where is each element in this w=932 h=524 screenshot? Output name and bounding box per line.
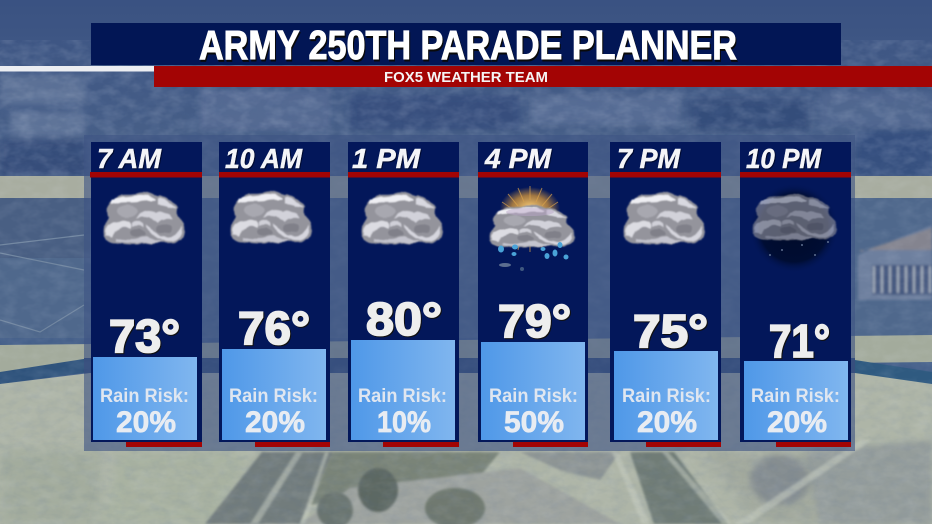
time label: 7 PM [617,143,681,174]
panel: 4 PM [478,142,588,447]
time label: 4 PM [484,143,552,174]
panel: 7 PM [610,142,721,447]
rain risk value: 20% [637,406,697,439]
title banner [0,22,932,87]
panel: 10 AM [219,142,330,447]
time label: 10 AM [225,143,303,174]
trees [317,455,810,524]
time label: 10 PM [746,143,822,174]
backing panel [84,135,855,451]
temperature: 71° [769,315,830,367]
title: ARMY 250TH PARADE PLANNER [199,22,737,68]
rain risk value: 50% [504,406,564,439]
rain risk label: Rain Risk: [751,386,840,407]
panel: 1 PM [348,142,459,447]
white accent line [0,66,155,72]
panel: 7 AM [90,142,202,447]
rain risk value: 20% [245,406,305,439]
icon: cloudy [624,192,705,244]
navy title bar [91,23,841,65]
city blocks [0,75,932,176]
temperature: 73° [109,310,180,362]
rain risk value: 10% [377,406,431,439]
blue-grey lawn [0,198,932,338]
lower lawn strip [0,335,932,372]
time label: 1 PM [352,143,421,174]
texture noise [0,40,932,176]
temperature: 75° [633,305,708,357]
rain risk box [351,340,455,440]
monument shadow wedges [205,452,728,524]
icon: night cloud [749,183,839,273]
classical building [858,225,932,300]
rain risk label: Rain Risk: [622,386,711,407]
time label: 7 AM [97,143,162,174]
temperature: 80° [366,293,442,345]
panel: 10 PM [740,142,851,447]
pale lawn strip [0,176,932,198]
icon: cloudy [362,192,443,244]
temperature: 76° [238,302,310,354]
rain risk box [93,357,197,440]
rain risk box [222,349,326,440]
rain risk value: 20% [116,406,176,439]
red subtitle bar [154,66,932,87]
light beams [250,440,872,524]
rain risk label: Rain Risk: [229,386,318,407]
icon: cloudy [104,192,185,244]
rain risk label: Rain Risk: [358,386,447,407]
rain risk box [614,351,718,440]
temperature: 79° [498,295,571,347]
subtitle: FOX5 WEATHER TEAM [384,69,548,86]
rain risk box [744,361,848,440]
rain risk label: Rain Risk: [489,386,578,407]
rain risk value: 20% [767,406,827,439]
rain risk label: Rain Risk: [100,386,189,407]
dark reflecting pool [0,358,90,384]
rain risk box [481,342,585,440]
icon: cloudy [231,191,312,244]
icon: storm with sun and rain [490,186,575,271]
lower ground [0,373,932,524]
